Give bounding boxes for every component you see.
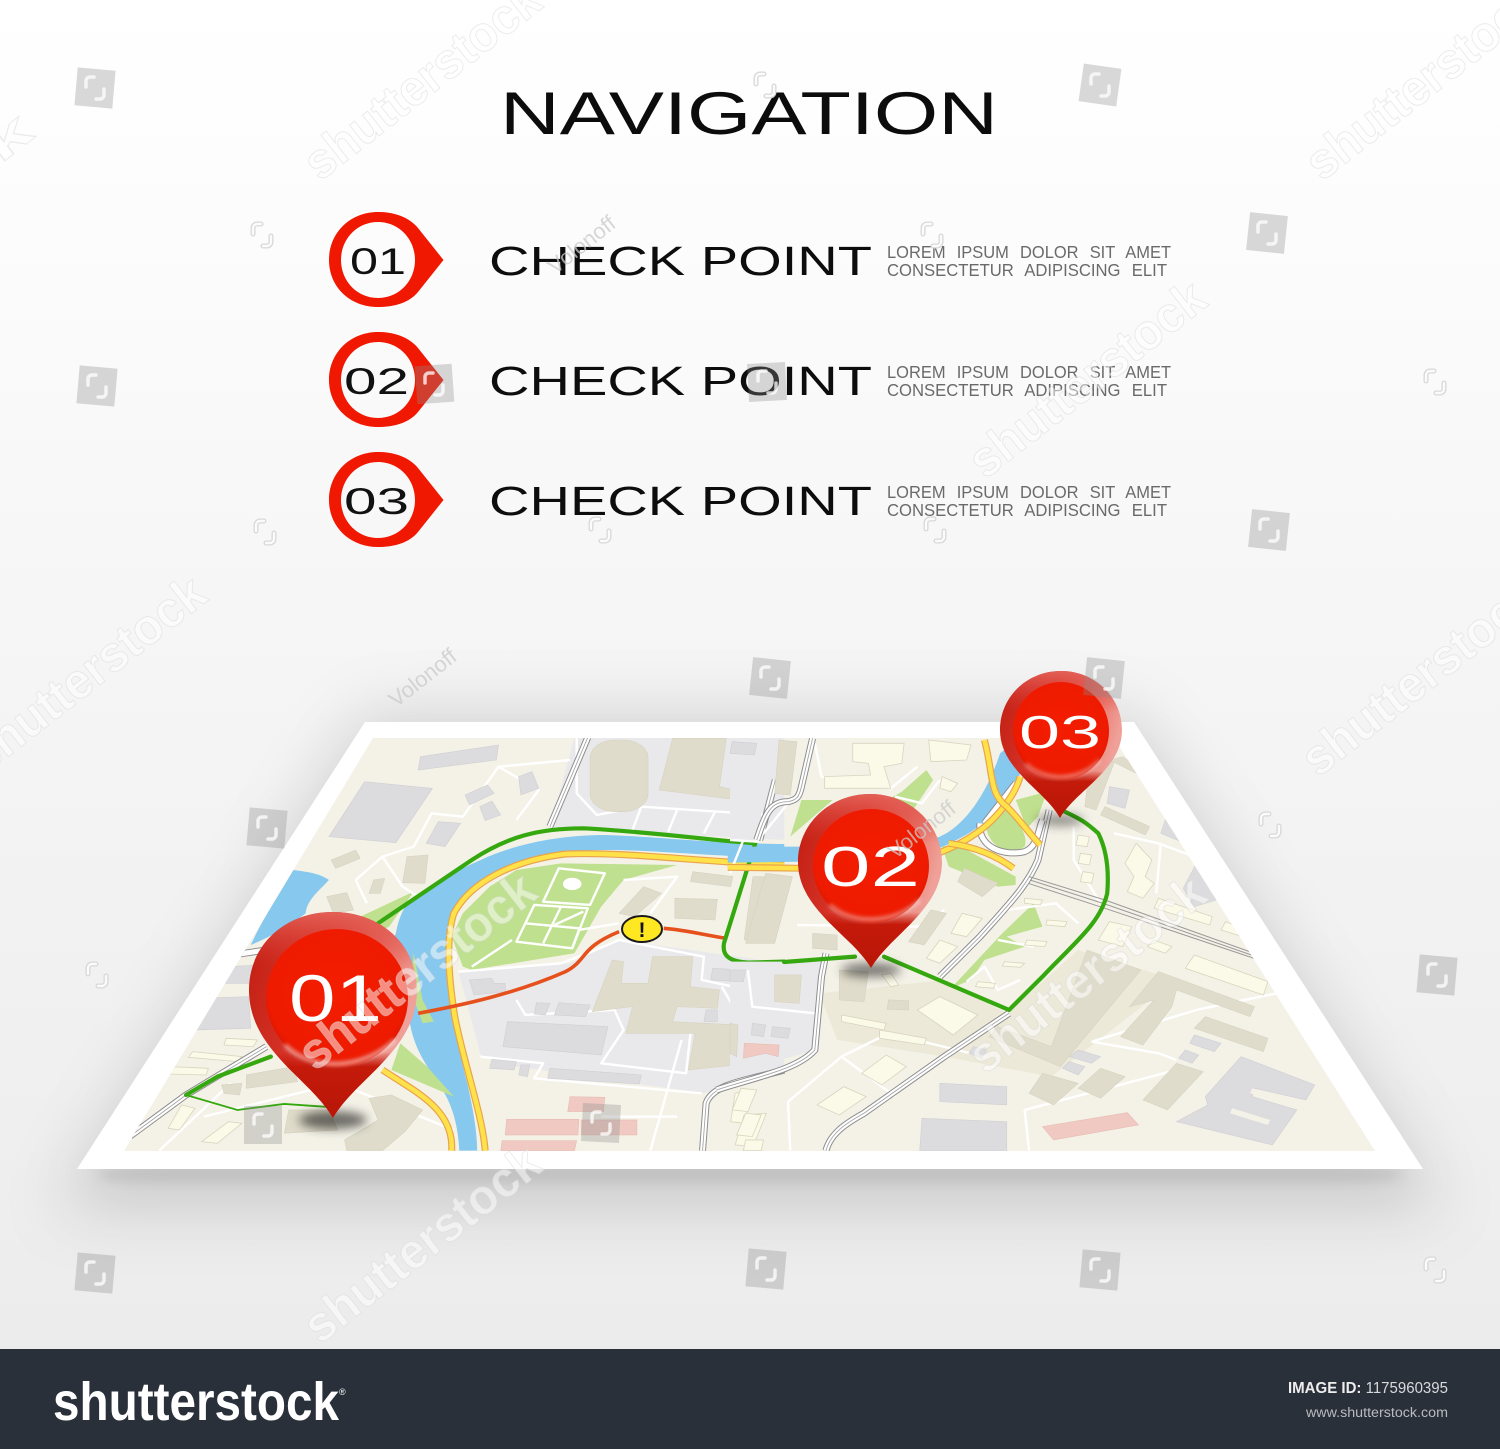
pin 03: 03: [1019, 706, 1101, 758]
watermark layer: Volonoff: [543, 210, 621, 279]
pin 02: [798, 794, 942, 977]
checkpoint 02 heading: CHECK POINT: [489, 358, 872, 404]
river east: [728, 740, 1025, 863]
watermark layer: shutterstock: [292, 1134, 551, 1354]
watermark layer: shutterstock: [287, 861, 546, 1081]
park: [360, 863, 677, 1097]
green route east: [784, 811, 1108, 1010]
checkpoint 03 description: LOREM IPSUM DOLOR SIT AMET: [887, 482, 1171, 502]
roads west: [130, 737, 784, 1151]
east ground areas: [730, 738, 1176, 1077]
site url: www.shutterstock.com: [1305, 1405, 1448, 1420]
river west: [392, 835, 784, 1151]
footer bar: [0, 1349, 1500, 1449]
park paths: [472, 868, 619, 967]
lake: [251, 870, 329, 945]
checkpoint 02 icon: 02: [344, 361, 409, 402]
checkpoint 03 heading: CHECK POINT: [489, 478, 872, 524]
watermark layer: Volonoff: [384, 643, 462, 712]
footer logo: ®: [339, 1387, 346, 1397]
buildings east: [730, 740, 1315, 1151]
checkpoint 01 description: [887, 242, 1171, 280]
map east half: [717, 738, 1315, 1151]
roads east: [717, 738, 1049, 1151]
minor streets west: [159, 737, 770, 1151]
checkpoint 02 icon: [329, 332, 444, 427]
checkpoint 02 description: [887, 362, 1171, 400]
checkpoint 01 icon: [329, 212, 444, 307]
rail lines: [1028, 877, 1259, 960]
city map: [100, 730, 1400, 1160]
watermark layer: shutterstock: [957, 269, 1216, 489]
pin 02: 02: [821, 835, 920, 899]
watermark layer: shutterstock: [957, 864, 1216, 1084]
checkpoint list: [329, 212, 1171, 547]
checkpoint 01 description: LOREM IPSUM DOLOR SIT AMET: [887, 242, 1171, 262]
checkpoint 03 icon: 03: [344, 481, 409, 522]
warning marker: [622, 916, 662, 942]
green route west: [186, 828, 784, 1110]
checkpoint 02 description: LOREM IPSUM DOLOR SIT AMET: [887, 362, 1171, 382]
map sheet: [77, 722, 1423, 1169]
checkpoint 01 icon: 01: [350, 241, 406, 282]
checkpoint 01 heading: CHECK POINT: [489, 238, 872, 284]
warning marker: !: [638, 919, 646, 942]
watermark layer: Volonoff: [883, 795, 961, 864]
map shadow: [55, 715, 1445, 1210]
map west half: [130, 737, 784, 1151]
footer logo: shutterstock: [53, 1372, 340, 1432]
pin 01: [249, 912, 417, 1129]
minor streets east: [730, 743, 1277, 1151]
checkpoint 01 description: CONSECTETUR ADIPISCING ELIT: [887, 260, 1167, 280]
buildings west: [168, 738, 770, 1151]
checkpoint 03 description: CONSECTETUR ADIPISCING ELIT: [887, 500, 1167, 520]
checkpoint 03 icon: [329, 452, 444, 547]
yellow road east: [728, 740, 1040, 873]
orange route: [418, 928, 726, 1013]
yellow road west: [382, 854, 784, 1151]
image id: IMAGE ID: 1175960395: [1288, 1380, 1448, 1397]
checkpoint 02 description: CONSECTETUR ADIPISCING ELIT: [887, 380, 1167, 400]
title: NAVIGATION: [500, 80, 998, 147]
parks east: [790, 770, 1047, 988]
pin 01: 01: [289, 961, 382, 1035]
pin 03: [1000, 671, 1122, 826]
checkpoint 03 description: [887, 482, 1171, 520]
institutional ground areas: [458, 737, 784, 1093]
